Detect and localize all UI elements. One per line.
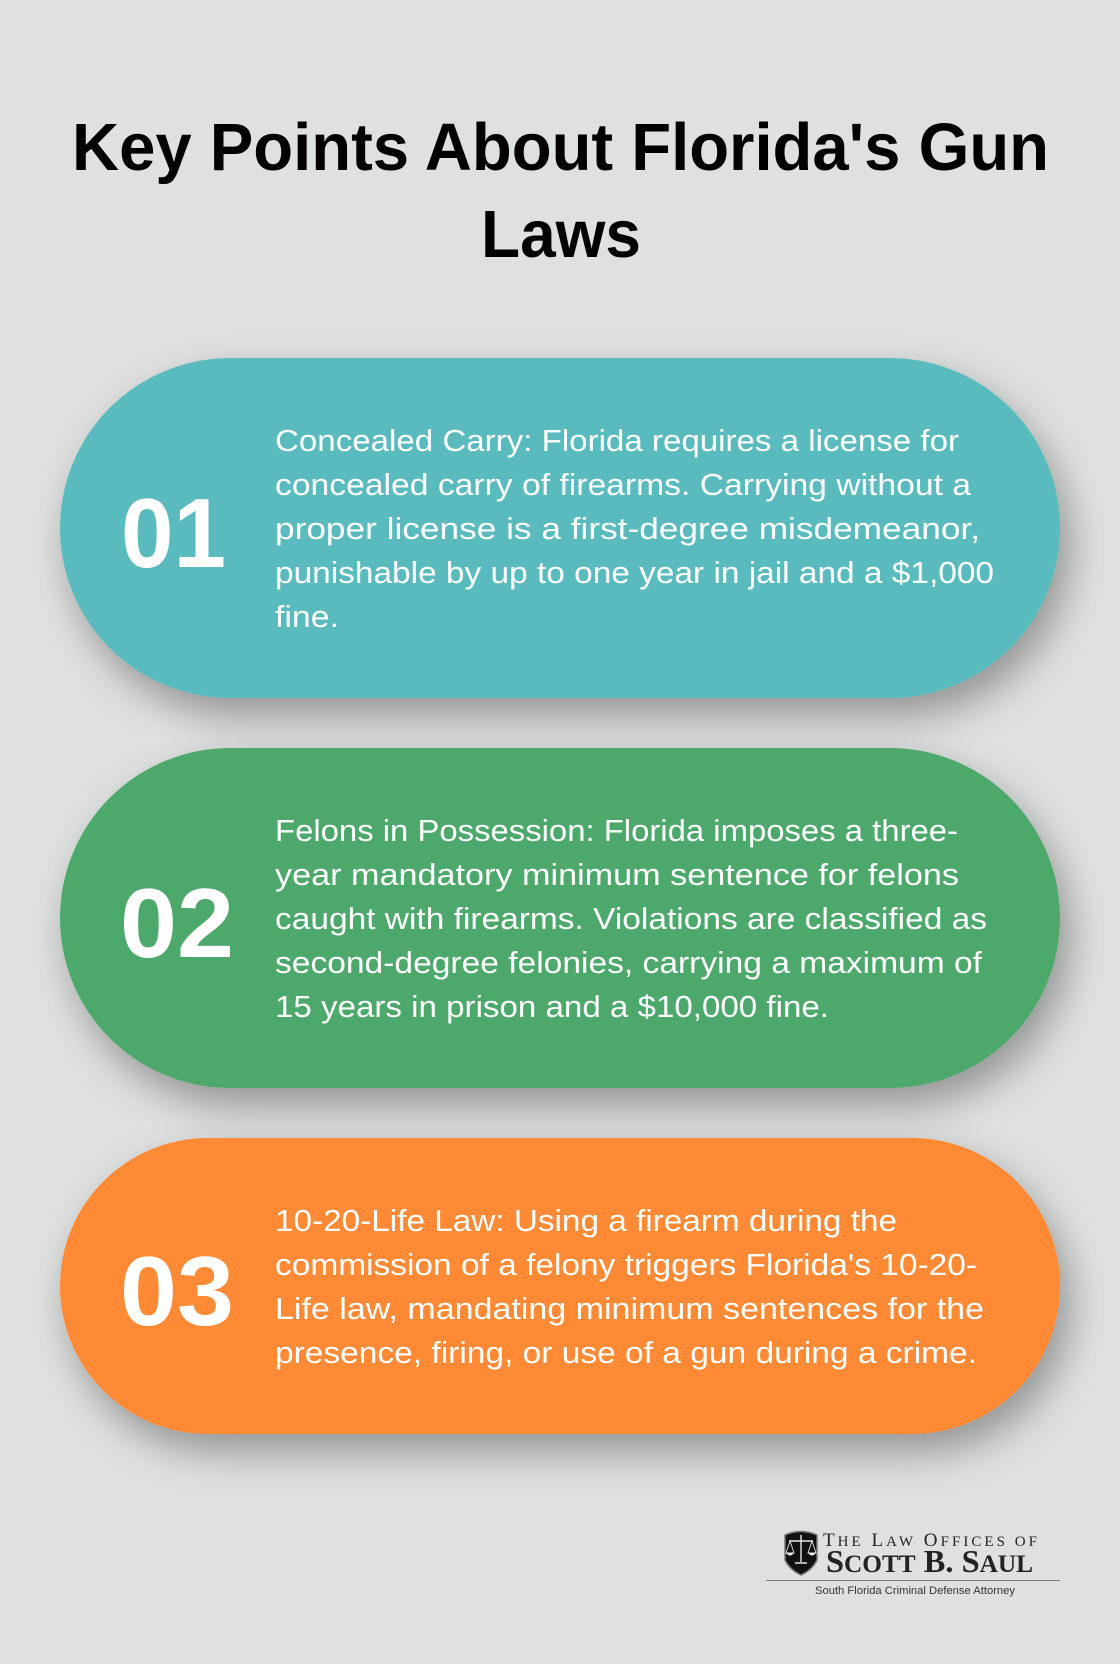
concealed carry text: proper license is a first-degree misdemeanor, [275,511,980,546]
orange pill background [60,1138,1060,1434]
number 03: 03 [120,1236,234,1346]
felons in possession text: caught with firearms. Violations are classified as [275,901,987,936]
10-20-life law text: presence, firing, or use of a gun during a crime. [275,1335,977,1370]
felons in possession text: second-degree felonies, carrying a maximum of [275,945,982,980]
10-20-life law text: Life law, mandating minimum sentences for the [275,1291,984,1326]
number 02: 02 [120,868,234,978]
title: Laws [481,197,641,272]
green pill background [60,748,1060,1088]
teal pill background [60,358,1060,698]
concealed carry text: Concealed Carry: Florida requires a license for [275,423,959,458]
logo [766,1530,1060,1597]
panel: 10-20-life law [60,1138,1060,1434]
title [72,110,1049,272]
number 01: 01 [121,478,226,588]
felons in possession text: year mandatory minimum sentence for felons [275,857,959,892]
icon: shield with scales [785,1532,817,1575]
firm name line 2: SCOTT B. SAUL [826,1543,1033,1579]
concealed carry text: concealed carry of firearms. Carrying without a [275,467,972,502]
concealed carry text [275,423,994,634]
firm name line 1: THE LAW OFFICES OF [823,1530,1037,1551]
10-20-life law text: 10-20-Life Law: Using a firearm during the [275,1203,897,1238]
concealed carry text: punishable by up to one year in jail and a $1,000 [275,555,994,590]
felons in possession text: 15 years in prison and a $10,000 fine. [275,989,829,1024]
concealed carry text: fine. [275,599,339,634]
panel: concealed carry [60,358,1060,698]
10-20-life law text [275,1203,984,1370]
tagline: South Florida Criminal Defense Attorney [815,1585,1016,1597]
panel: felons in possession [60,748,1060,1088]
10-20-life law text: commission of a felony triggers Florida's 10-20- [275,1247,977,1282]
title: Key Points About Florida's Gun [72,110,1049,185]
felons in possession text: Felons in Possession: Florida imposes a three- [275,813,958,848]
felons in possession text [275,813,987,1024]
